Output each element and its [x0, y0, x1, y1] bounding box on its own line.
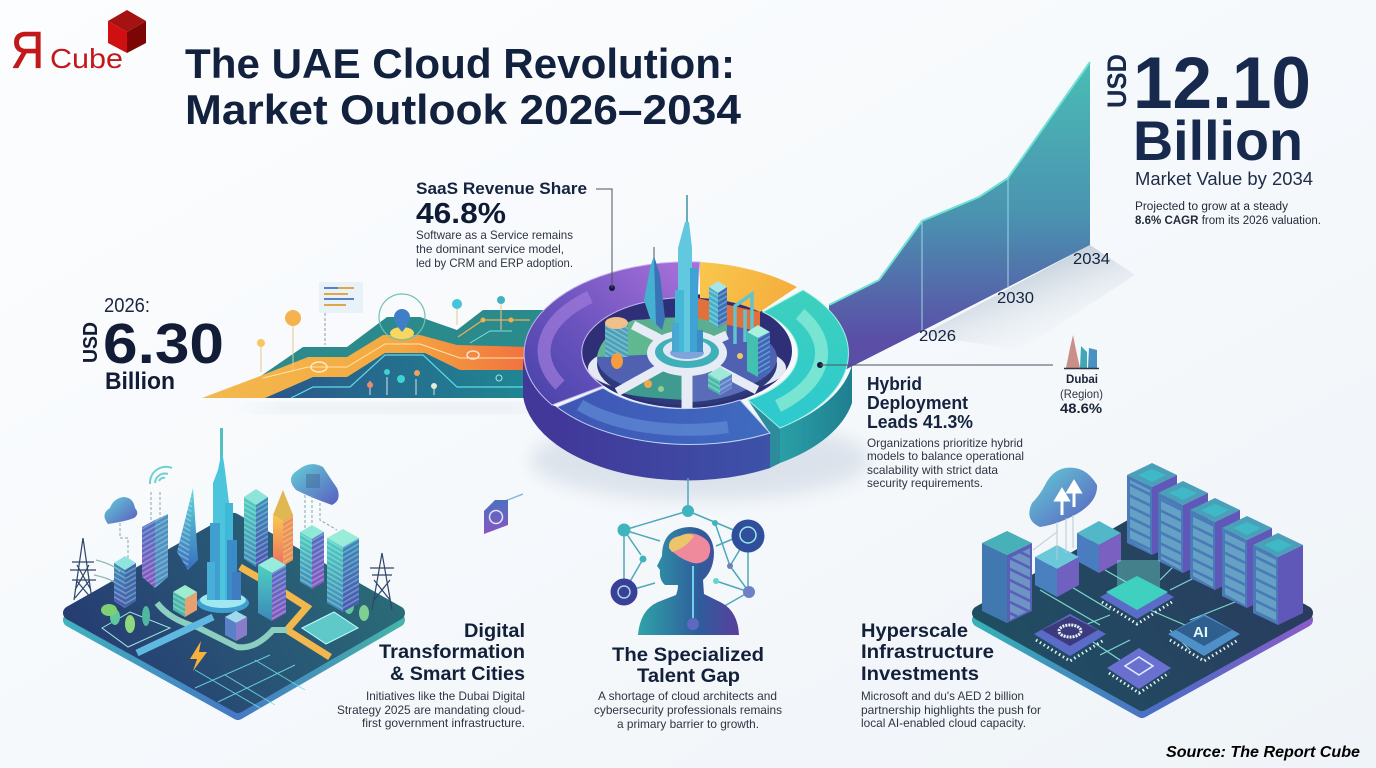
callout: hybrid deployment: scalability with strict data	[867, 463, 998, 477]
callout: SaaS revenue share: led by CRM and ERP adoption.	[416, 256, 573, 270]
text: specialized talent gap: cybersecurity professionals remains	[594, 703, 782, 717]
stat: USD 6.30 Billion in 2026: Billion	[105, 368, 175, 395]
illustration: talent network and head	[610, 478, 764, 635]
callout: hybrid deployment: models to balance operational	[867, 449, 1024, 463]
text: hyperscale infrastructure: partnership highlights the push for	[861, 703, 1041, 717]
growth area chart: 2030	[997, 290, 1034, 307]
text: hyperscale infrastructure: Microsoft and du's AED 2 billion	[861, 689, 1024, 703]
logo: RCube: Я	[11, 22, 44, 80]
text: digital transformation: Transformation	[379, 641, 525, 663]
city towers	[605, 195, 770, 395]
server racks	[982, 463, 1303, 625]
Dubai region share	[1060, 335, 1103, 416]
Dubai region share: Dubai	[1066, 374, 1098, 386]
text: hyperscale infrastructure: Investments	[861, 663, 979, 685]
stat: USD 6.30 Billion in 2026: 2026:	[104, 295, 150, 317]
callout: hybrid deployment: Leads 41.3%	[867, 412, 973, 432]
text: hyperscale infrastructure: local AI-enabled cloud capacity.	[861, 716, 1026, 730]
yellow segment	[697, 262, 797, 332]
callout: hybrid deployment: Deployment	[867, 393, 968, 413]
logo: RCube	[11, 10, 146, 80]
illustration: smart city platform	[70, 428, 398, 713]
stat: USD 12.10 Billion by 2034: Projected to grow at a steady	[1135, 201, 1288, 213]
stat: USD 12.10 Billion by 2034: 12.10	[1133, 43, 1311, 124]
stat: USD 12.10 Billion by 2034: Billion	[1133, 109, 1303, 172]
callout: SaaS revenue share: 46.8%	[416, 198, 506, 230]
stat: USD 12.10 Billion by 2034: Market Value by 2034	[1135, 169, 1313, 189]
Dubai region share: (Region)	[1060, 387, 1103, 401]
text: specialized talent gap: A shortage of cloud architects and	[598, 689, 777, 703]
teal segment: Hybrid	[748, 290, 848, 428]
callout: SaaS revenue share: the dominant service model,	[416, 242, 564, 256]
marker dots	[609, 285, 823, 368]
small compute boxes	[1035, 521, 1121, 597]
text: digital transformation: first government infrastructure.	[362, 716, 525, 730]
callout: hybrid deployment	[820, 365, 1053, 490]
callout: hybrid deployment: security requirements.	[867, 476, 983, 490]
logo: RCube: Cube	[50, 43, 123, 74]
text: hyperscale infrastructure: Hyperscale	[861, 620, 968, 642]
text: digital transformation: & Smart Cities	[390, 663, 525, 685]
Dubai region share: 48.6%	[1060, 401, 1102, 416]
icon: Dubai skyline	[1064, 335, 1099, 368]
trees	[101, 598, 369, 633]
callout: hybrid deployment: Hybrid	[867, 374, 922, 394]
growth area chart	[829, 62, 1135, 378]
callout: SaaS revenue share	[416, 180, 612, 288]
cloud with upload arrows	[1029, 468, 1097, 560]
growth area chart: 2026	[919, 328, 956, 345]
callout: SaaS revenue share: SaaS Revenue Share	[416, 180, 587, 198]
text: digital transformation: Digital	[464, 620, 525, 642]
text: specialized talent gap: Talent Gap	[637, 665, 740, 687]
title: Market Outlook 2026–2034	[185, 86, 742, 133]
text: digital transformation: Initiatives like the Dubai Digital	[366, 689, 525, 703]
stat: USD 6.30 Billion in 2026: USD	[80, 322, 102, 363]
pie side walls	[523, 358, 852, 480]
icon: globe card	[484, 494, 523, 534]
roads	[102, 567, 358, 708]
text: specialized talent gap	[594, 644, 782, 731]
purple segment: SaaS	[524, 262, 700, 405]
processor chips: AI	[1193, 624, 1208, 641]
processor chips	[1034, 560, 1240, 693]
source note: Source: The Report Cube	[1166, 744, 1360, 761]
growth area chart: 2034	[1073, 251, 1110, 268]
text: specialized talent gap: The Specialized	[612, 644, 764, 666]
stat: USD 6.30 Billion in 2026	[80, 295, 224, 395]
inner well and city disc	[582, 294, 792, 408]
buildings	[114, 428, 359, 641]
text: specialized talent gap: a primary barrier to growth.	[617, 717, 759, 731]
stat: USD 12.10 Billion by 2034	[1102, 43, 1321, 227]
text: digital transformation: Strategy 2025 are mandating cloud-	[337, 703, 525, 717]
clouds and wifi	[104, 464, 339, 558]
text: hyperscale infrastructure: Infrastructure	[861, 641, 994, 663]
stat: USD 12.10 Billion by 2034: USD	[1102, 54, 1132, 108]
blue segment	[557, 388, 770, 445]
illustration: hyperscale data center	[979, 463, 1306, 711]
text: hyperscale infrastructure	[861, 620, 1041, 730]
data ribbon from 2026	[202, 282, 545, 412]
callout: hybrid deployment: Organizations prioritize hybrid	[867, 436, 1023, 450]
title: The UAE Cloud Revolution:	[185, 40, 735, 87]
stat: USD 6.30 Billion in 2026: 6.30	[103, 312, 224, 376]
circuit traces	[1040, 560, 1240, 660]
landmark tower	[672, 195, 703, 352]
power pylons	[70, 538, 394, 610]
title	[185, 40, 742, 133]
callout: SaaS revenue share: Software as a Service remains	[416, 228, 573, 242]
central segmented pie with city	[523, 195, 870, 500]
stat: USD 12.10 Billion by 2034: 8.6% CAGR from its 2026 valuation.	[1135, 215, 1321, 227]
text: digital transformation	[337, 620, 525, 730]
